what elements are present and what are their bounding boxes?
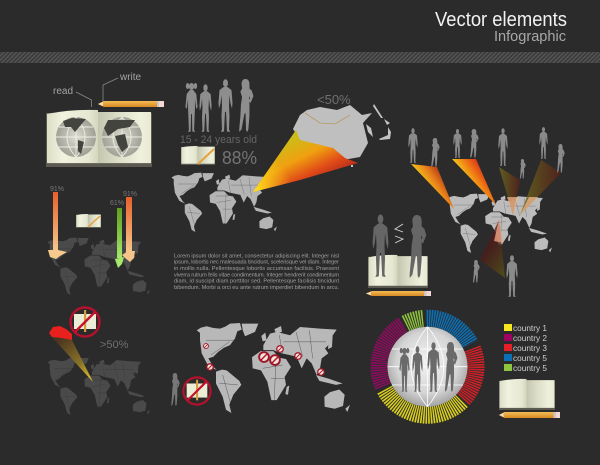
world map: large: [197, 323, 350, 413]
panel: radial chart: [379, 318, 476, 415]
text block: lorem ipsum: ipsum, lobortis nec malesuada tincidunt, scelerisque vel diam. Integer: [174, 260, 339, 266]
panel: gender comparison on book: [366, 214, 431, 296]
label: less than 50 percent: <50%: [317, 92, 351, 107]
globe: [388, 327, 468, 407]
text block: lorem ipsum: viverra rutrum felis vitae condimentum. Integer hendrerit condimentum: [174, 272, 339, 278]
panel: map with no-reading signs: [171, 323, 350, 413]
percentage: 88%: [222, 148, 257, 168]
panel: dark map with bars: [47, 186, 150, 295]
donut segment: blue: [427, 318, 470, 344]
title: Vector elements: [435, 9, 567, 31]
world map: grey: [171, 173, 277, 232]
panel: youth literacy: [180, 79, 257, 168]
open book: [46, 110, 152, 167]
panel: people to regions map: [408, 127, 565, 297]
ray to China: [253, 130, 358, 192]
legend: country 2: [513, 333, 547, 343]
panel: illiteracy over 50 percent: [47, 308, 150, 415]
panel: read and write book: [46, 72, 164, 167]
shape: China highlight: [122, 251, 135, 262]
red region shape: [49, 326, 72, 340]
value 61%: 61%: [110, 200, 124, 207]
ray to Africa: [50, 335, 93, 382]
label: write: write: [119, 72, 142, 83]
hatched header band: [0, 52, 600, 63]
text block: lorem ipsum: diam, id suscipit diam porttitor sed. Pellentesque facilisis tincidunt: [174, 278, 339, 284]
text block: lorem ipsum: Lorem ipsum dolor sit amet, consectetur adipiscing elit. Integer nisl: [174, 254, 339, 260]
label: more than 50 percent: >50%: [100, 339, 129, 351]
ray glow at apex: [253, 130, 300, 192]
open book, lower right: [499, 379, 555, 410]
pencil: [98, 101, 164, 107]
donut segment: yellow: [385, 390, 462, 415]
people in globe: [399, 342, 458, 392]
left globe: [56, 117, 96, 157]
man silhouette: [373, 214, 388, 277]
legend: [504, 323, 547, 373]
ray: Europe: [452, 159, 496, 205]
callout lines: [76, 78, 118, 107]
text block: lorem ipsum: [174, 254, 339, 291]
China map: [293, 105, 372, 160]
woman silhouette: [171, 373, 180, 406]
world map: right: [447, 194, 552, 253]
donut segment: green: [406, 318, 423, 324]
ray: upper bright tips: [507, 197, 538, 215]
no-reading sign: [70, 308, 100, 336]
legend: country 5: [513, 353, 547, 363]
orange bar right: [126, 197, 132, 253]
large no-reading sign: [183, 377, 211, 405]
value 91% left: 91%: [50, 186, 64, 193]
China border line: [305, 113, 350, 124]
people silhouettes: [408, 127, 565, 297]
woman silhouette: [410, 215, 426, 278]
subtitle: Infographic: [494, 29, 566, 45]
donut segment: purple: [379, 325, 403, 386]
label: read: read: [53, 86, 73, 97]
Korea and Japan islands: [351, 104, 391, 167]
donut segment: red: [463, 348, 476, 400]
orange bar left: [53, 192, 58, 252]
youth silhouettes: [185, 79, 253, 132]
small book icon: [76, 214, 101, 228]
world map: dark lower: [47, 358, 150, 415]
shape: India highlight: [115, 257, 124, 268]
ray: Africa: [480, 220, 505, 278]
shape: USA highlight: [48, 250, 67, 259]
text block: lorem ipsum: bibendum. Morbi a orci eu ante rutrum imperdiet bibendum in arcu.: [174, 285, 339, 291]
age label: 15 - 24 years old: [180, 134, 257, 146]
right globe: [102, 117, 142, 157]
open book: [368, 255, 428, 288]
ray: Asia: [520, 160, 561, 215]
ray: Middle East: [499, 167, 520, 215]
ray: Africa bright tip: [494, 219, 503, 243]
legend: country 1: [513, 323, 547, 333]
pencil: [366, 291, 431, 296]
value 91% right: 91%: [123, 191, 137, 198]
text block: lorem ipsum: in mollis nulla. Pellentesque lobortis accumsan facilisis. Praesent: [174, 266, 339, 272]
green bar: [117, 208, 122, 258]
world map: dark: [47, 238, 150, 295]
legend: country 5: [513, 363, 547, 373]
small book with pencil: [181, 146, 215, 165]
legend: country 3: [513, 343, 547, 353]
ray: North America: [411, 164, 454, 209]
less or greater symbol: [395, 224, 403, 243]
country markers: [204, 344, 324, 375]
pencil, lower right: [499, 412, 560, 418]
